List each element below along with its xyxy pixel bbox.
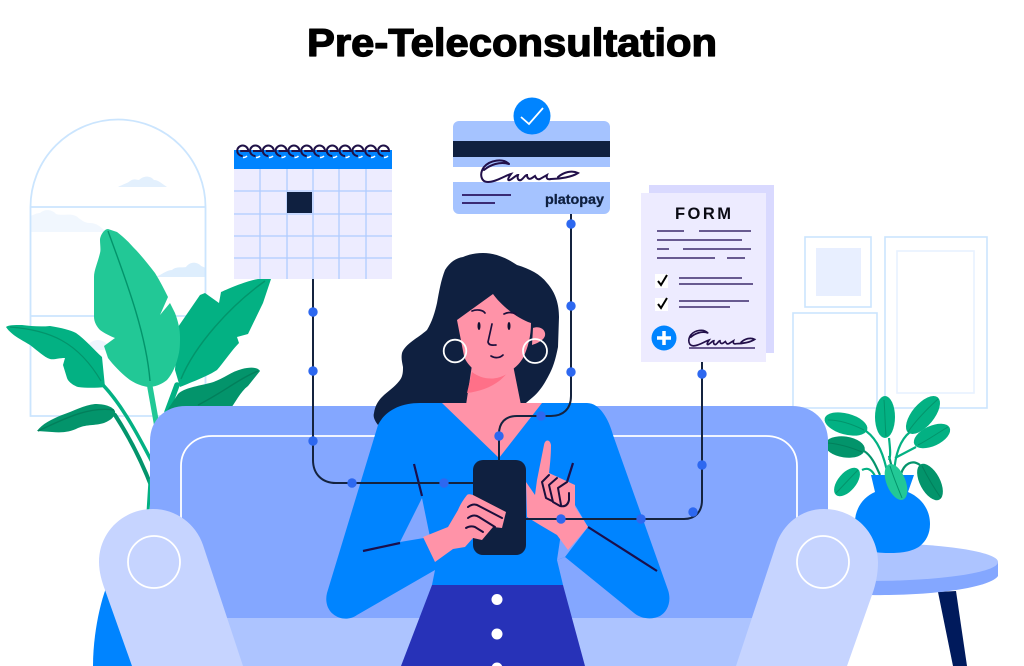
table leg	[938, 591, 967, 666]
checkbox one	[655, 274, 668, 288]
connector wires	[313, 214, 702, 519]
skirt buttons	[492, 594, 502, 666]
sweater	[326, 403, 669, 619]
lower dark leaves	[37, 368, 260, 432]
calendar	[234, 146, 392, 279]
calendar grid	[234, 168, 392, 279]
left hand finger lines	[466, 505, 502, 532]
sofa	[93, 406, 878, 666]
side table	[742, 543, 998, 666]
form text lines	[657, 231, 755, 348]
calendar header	[234, 150, 392, 169]
central leaf	[94, 229, 180, 387]
left arm circle	[128, 536, 180, 588]
calendar rings	[237, 146, 389, 158]
form signature	[689, 330, 755, 346]
neck shadow	[467, 372, 507, 393]
hair	[374, 253, 559, 425]
window frame	[30, 120, 206, 416]
front leaf	[880, 461, 912, 503]
form	[641, 185, 774, 362]
magnetic stripe	[453, 141, 610, 157]
signature strip	[453, 167, 610, 182]
sofa seat	[150, 618, 828, 666]
sofa back seam	[181, 436, 797, 525]
clouds	[30, 177, 206, 350]
earrings	[444, 339, 547, 363]
left leaf	[6, 325, 105, 388]
skirt	[401, 585, 585, 666]
calendar body	[234, 168, 392, 279]
neck	[466, 365, 521, 405]
ring loops	[237, 146, 389, 156]
sweater gaps	[400, 498, 588, 560]
plant stems	[862, 431, 920, 476]
eyes, brows, nose, mouth	[472, 310, 516, 358]
title: Pre-Teleconsultation	[307, 22, 717, 65]
card lines	[462, 195, 511, 203]
woman	[326, 253, 669, 666]
left hand	[423, 494, 506, 562]
plant leaf veins	[828, 399, 948, 498]
right arm circle	[797, 536, 849, 588]
payment card	[453, 98, 610, 214]
leaf veins	[10, 231, 265, 431]
stems	[103, 385, 177, 512]
sofa back	[150, 406, 828, 666]
right hand finger lines	[542, 475, 569, 506]
card signature	[481, 160, 578, 182]
potted plant	[822, 390, 954, 553]
phone	[473, 460, 526, 555]
face	[457, 294, 531, 378]
add icon	[652, 326, 676, 350]
front sheet	[641, 193, 766, 362]
form heading: FORM	[675, 205, 731, 223]
verified badge	[514, 98, 550, 134]
plant leaves	[822, 390, 954, 504]
right arm	[736, 509, 878, 666]
wall picture frames	[793, 237, 987, 408]
checkbox two	[655, 298, 668, 311]
right leaf	[175, 279, 271, 387]
table rim	[870, 562, 998, 595]
back sheet	[649, 185, 774, 353]
arched window	[30, 120, 206, 416]
card body	[453, 121, 610, 214]
vase	[855, 475, 930, 553]
V-neck	[442, 403, 542, 458]
calendar marked day	[287, 192, 312, 213]
ring highlights	[243, 156, 388, 158]
ear	[532, 327, 545, 345]
table top	[742, 543, 998, 581]
connector dots	[308, 219, 707, 524]
blue sofa base behind arm	[93, 588, 140, 666]
left arm	[99, 509, 243, 666]
platopay brand: platopay	[545, 191, 604, 207]
sleeve fold lines	[363, 463, 657, 571]
right hand	[526, 440, 588, 550]
large plant	[6, 229, 271, 512]
